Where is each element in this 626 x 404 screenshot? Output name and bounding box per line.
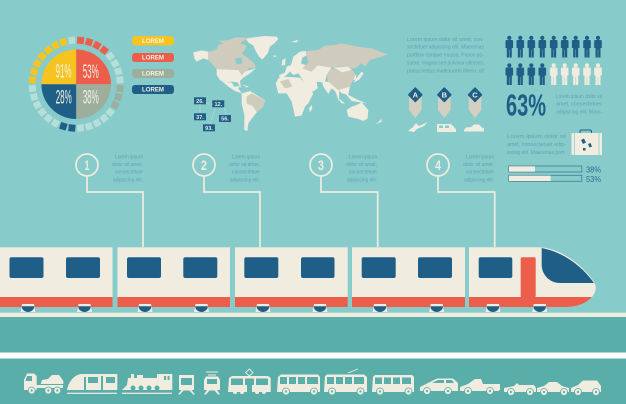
step 2 connector [193,154,260,247]
top text block: Lorem ipsum dolor sit amet, con- [407,37,484,43]
step 4 text [463,154,494,184]
step 1 text [112,154,143,184]
step 4 text: dolor sit amet, [463,162,494,168]
legend: LOREM [142,39,164,45]
icon: pickup [460,379,500,395]
progress bars [509,166,601,184]
train car 1 [0,247,112,307]
donut chart: 28% [56,88,72,108]
icon: trolleybus [324,369,367,395]
icon: van [571,380,601,396]
map labels: 56. [221,117,229,123]
train car 4 [352,247,465,307]
icon: steam locomotive [122,374,172,394]
progress bars: 38% [586,166,601,174]
train locomotive [469,247,596,307]
people pictogram [506,36,602,85]
legend: LOREM [142,56,164,62]
option markers A B C: B [442,90,448,100]
map labels: 26. [196,99,204,105]
option markers A B C: C [472,90,478,100]
legend: LOREM [142,88,164,94]
step 3 text: Lorem ipsum [349,154,377,160]
legend [132,36,174,94]
step 4 connector: 4 [435,157,441,173]
train car 3 [235,247,348,307]
top text block [407,37,484,75]
top text block: porttitor congue massa. Fusce po- [407,53,484,59]
map labels: 12. [214,102,223,108]
step 3 text: dolor sit amet, [346,162,377,168]
top text block: sectetuer adipiscing elit. Maecenas [407,45,484,51]
icon: minivan [420,378,458,395]
icon: plane [408,122,428,132]
step 3 text [346,154,377,184]
world map [193,36,388,131]
top text block: suere, magna sed pulvinar ultricies, [407,61,484,67]
donut chart: 91% [56,62,72,82]
text beside percentage: adipiscing elit. Maur- [556,110,602,116]
step 3 connector: 3 [318,157,324,173]
icon: coach [372,375,414,395]
text beside percentage [556,94,602,116]
step 3 text: consectetuer [349,170,377,176]
step 4 text: adipiscing elit. [464,178,494,184]
train car 2 [118,247,230,307]
icon: small train [437,124,456,132]
text beside suitcase [507,134,567,156]
legend: LOREM [142,72,164,78]
icon: bus [277,374,320,395]
icon: car transporter truck [24,374,63,394]
map labels: 93. [205,126,213,132]
step 2 text: adipiscing elit. [230,178,260,184]
train [0,247,596,312]
progress bars: 53% [586,175,601,184]
train wheels [20,304,547,312]
step 1 connector [76,154,143,247]
top text block: purus lectus malesuada libero, sit [407,69,484,75]
step 1 connector: 1 [84,157,90,173]
step 2 text [229,154,260,184]
icon: modern train [67,374,117,394]
donut chart [29,37,124,132]
text beside suitcase: amet, consectetuer adip- [507,142,566,148]
map labels: 37. [196,115,204,121]
donut chart: 38% [83,88,99,108]
text beside suitcase: iscing elit. Maecenas port- [507,150,566,156]
icon: hatchback [537,382,569,396]
step 1 text: adipiscing elit. [113,178,143,184]
icon: tram [228,369,271,394]
step 1 text: dolor sit amet, [112,162,143,168]
step 4 text: consectetuer [466,170,494,176]
donut chart: 53% [83,62,99,83]
icon: metro front [204,372,220,394]
step 2 text: dolor sit amet, [229,162,260,168]
icon: train front [178,375,195,394]
ground band [0,313,626,404]
step 1 text: consectetuer [115,170,143,176]
step 2 text: consectetuer [232,170,260,176]
vehicle icons row [24,369,601,396]
option markers A B C [409,88,482,118]
text beside percentage: Lorem ipsum dolor sit [556,94,602,100]
text beside percentage: amet, consectetuer [556,102,602,108]
option markers A B C: A [413,90,419,100]
text beside suitcase: Lorem ipsum dolor sit [507,134,567,140]
big percentage: 63% [506,88,546,123]
step 3 text: adipiscing elit. [347,178,377,184]
step 2 connector: 2 [201,157,207,173]
step 4 connector [427,154,495,247]
step 1 text: Lorem ipsum [115,154,143,160]
map labels [194,97,231,132]
icon: convertible [504,383,536,396]
step 4 text: Lorem ipsum [466,154,494,160]
step 2 text: Lorem ipsum [232,154,260,160]
step 3 connector [310,154,378,247]
icon: suitcase [572,130,602,155]
icon: small car [464,124,484,132]
